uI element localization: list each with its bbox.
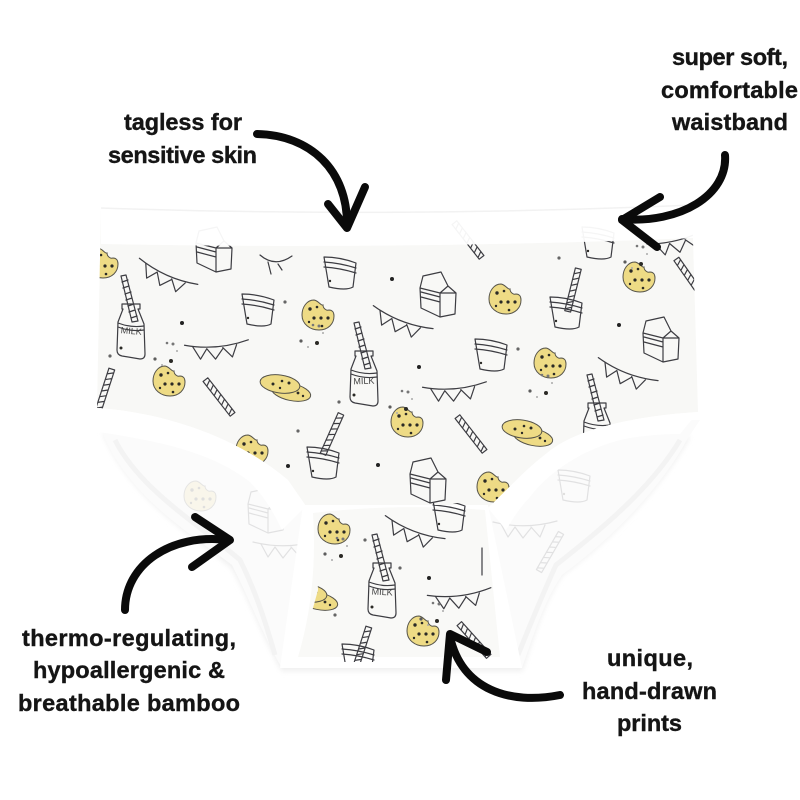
milk bottles: MILK bbox=[120, 325, 142, 337]
underwear garment bbox=[86, 205, 713, 676]
label: prints: hand-drawn bbox=[582, 678, 717, 704]
label: prints: unique, bbox=[607, 645, 693, 671]
label: bamboo: thermo-regulating, bbox=[22, 625, 236, 651]
arrow: waistband bbox=[622, 155, 725, 247]
leg binding left bbox=[97, 408, 306, 530]
milk drip bbox=[260, 255, 292, 274]
garment shadow bbox=[103, 432, 690, 671]
buntings bbox=[133, 228, 713, 403]
crumbs and dots bbox=[108, 245, 648, 468]
arrow: prints bbox=[446, 634, 560, 698]
front body panel bbox=[97, 205, 698, 508]
back layer seen through leg openings bbox=[101, 420, 700, 668]
arrow: tagless bbox=[257, 134, 365, 228]
label: waistband: waistband bbox=[671, 109, 788, 135]
cookies bbox=[86, 248, 655, 502]
waistband bbox=[101, 205, 694, 246]
glasses bbox=[242, 227, 614, 479]
label: waistband: comfortable bbox=[661, 77, 798, 103]
crotch panel print bbox=[312, 503, 492, 662]
double cookies bbox=[259, 372, 554, 449]
label: bamboo: breathable bamboo bbox=[18, 690, 240, 716]
label: prints: prints bbox=[617, 710, 682, 736]
crotch panel print: MILK bbox=[371, 586, 393, 598]
milk bottles: MILK bbox=[353, 376, 375, 386]
straws bbox=[95, 221, 704, 455]
label: bamboo: hypoallergenic & bbox=[33, 657, 225, 683]
label: tagless: tagless for bbox=[124, 109, 242, 135]
label: tagless: sensitive skin bbox=[108, 142, 257, 168]
label: waistband: super soft, bbox=[672, 44, 788, 70]
fabric print on front body bbox=[86, 221, 713, 503]
milk bottles bbox=[117, 275, 611, 458]
crotch panel bbox=[280, 500, 522, 676]
leg binding right bbox=[488, 412, 698, 530]
arrow: bamboo bbox=[125, 517, 230, 610]
cartons bbox=[196, 227, 679, 503]
